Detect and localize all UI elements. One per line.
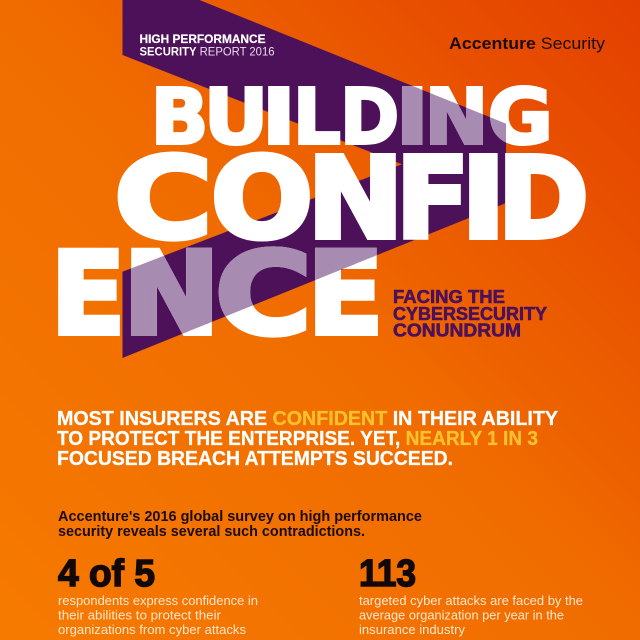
headline statement: FOCUSED BREACH ATTEMPTS SUCCEED. [57, 447, 453, 470]
stat description: their abilities to protect their [58, 608, 221, 622]
overlap tint: ING: U [204, 74, 268, 162]
subtitle [393, 286, 548, 341]
stat number: 4 of 5 [58, 553, 155, 595]
stat: 113 [359, 553, 583, 637]
overlap tint: ING: I [396, 74, 429, 162]
title line: CONFID: F [396, 134, 470, 264]
title line: BUILDING: U [204, 74, 268, 162]
subtitle: CONUNDRUM [393, 320, 521, 341]
title line: BUILDING: N [425, 74, 488, 162]
title line: ENCE: E [307, 228, 384, 360]
survey intro: security reveals several such contradictions. [58, 523, 365, 540]
headline statement [57, 407, 558, 470]
overlap tint: ENCE [131, 246, 377, 336]
title line: CONFID: O [211, 134, 313, 264]
title line: BUILDING: I [261, 74, 296, 162]
overlap tint: ING: I [261, 74, 296, 162]
title line: BUILDING: G [488, 74, 553, 162]
overlap tint: ING: L [293, 74, 341, 162]
title line: CONFID: I [461, 134, 506, 264]
title line: CONFID: C [114, 134, 213, 264]
title: BUILDING CONFIDENCE [58, 85, 586, 338]
subtitle: CYBERSECURITY [393, 303, 548, 324]
stat description [58, 594, 258, 637]
title line: BUILDING: I [396, 74, 429, 162]
stat description [359, 594, 583, 637]
overlap tint: ENCE: N [123, 228, 220, 360]
stat description: average organization per year in the [359, 608, 564, 622]
stat description: targeted cyber attacks are faced by the [359, 594, 583, 608]
headline statement: TO PROTECT THE ENTERPRISE. YET, NEARLY 1 IN 3 [57, 427, 538, 450]
title line: ENCE: N [123, 228, 220, 360]
title line: CONFID: D [498, 134, 589, 264]
overlap tint: ING: N [425, 74, 488, 162]
report label: SECURITY REPORT 2016 [140, 46, 274, 58]
survey intro: Accenture's 2016 global survey on high performance [58, 508, 422, 525]
stat description: organizations from cyber attacks [58, 623, 246, 637]
stat: 4 of 5 [58, 553, 258, 637]
stat description: respondents express confidence in [58, 594, 258, 608]
title line: BUILDING: D [340, 74, 399, 162]
survey intro [58, 508, 422, 540]
purple arrow shape [122, 0, 506, 358]
headline statement: MOST INSURERS ARE CONFIDENT IN THEIR ABILITY [57, 407, 558, 430]
overlap tint: ING: G [488, 74, 553, 162]
report label: HIGH PERFORMANCE [140, 34, 266, 46]
title line: BUILDING: B [151, 74, 208, 162]
brand: Accenture Security: Accenture Security [449, 34, 606, 53]
subtitle: FACING THE [393, 286, 505, 307]
stat description: insurance industry [359, 623, 466, 637]
title line: ENCE: E [50, 228, 126, 360]
title line: ENCE: C [215, 228, 312, 360]
overlap tint: ENCE: E [50, 228, 126, 360]
stat number: 113 [359, 553, 416, 595]
overlap tint: ING: B [151, 74, 208, 162]
title line: BUILDING: L [293, 74, 341, 162]
overlap tint: ENCE: E [307, 228, 384, 360]
overlap tint: ING [402, 86, 506, 145]
report label [140, 34, 274, 58]
overlap tint: ENCE: C [215, 228, 312, 360]
title line: CONFID: N [307, 134, 404, 264]
overlap tint: ING: D [340, 74, 399, 162]
